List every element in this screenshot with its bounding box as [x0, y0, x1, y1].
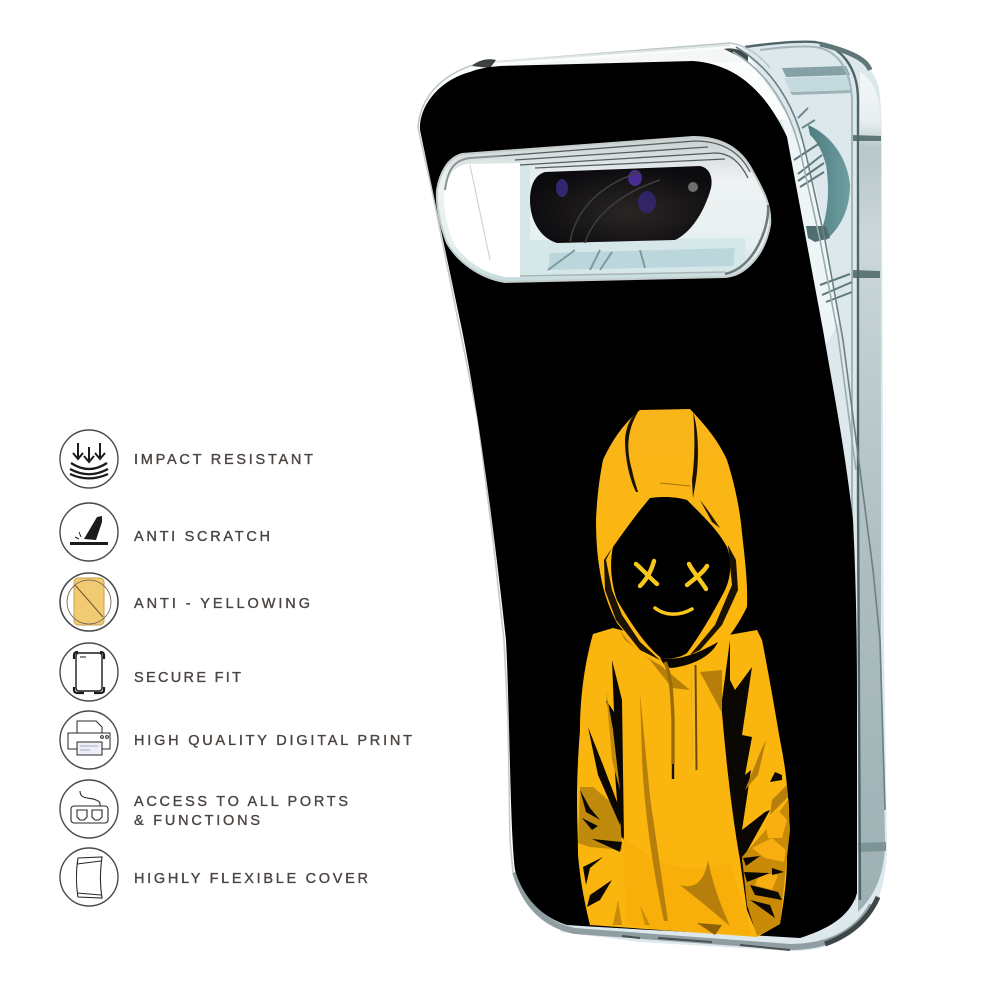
right arm black wedges: [722, 640, 770, 934]
face shadow: [611, 497, 730, 658]
feature: high quality digital print: [60, 711, 412, 769]
black printed case back: [420, 61, 857, 938]
hood inner shadow streaks: [604, 545, 738, 660]
feature list: [60, 430, 412, 906]
label: ANTI SCRATCH: [134, 529, 270, 545]
hood collar amber shadows: [617, 625, 722, 713]
icon: ports: [60, 780, 118, 838]
case bottom band: [515, 872, 872, 947]
label: HIGHLY FLEXIBLE COVER: [134, 871, 368, 887]
label: HIGH QUALITY DIGITAL PRINT: [134, 733, 412, 749]
neck shadow: [660, 642, 718, 668]
feature: highly flexible cover: [60, 848, 368, 906]
icon: bent cover: [60, 848, 118, 906]
icon: impact arrows: [60, 430, 118, 488]
icon: printer: [60, 711, 118, 769]
left arm amber shadow: [578, 690, 622, 850]
body swoosh shadow: [680, 860, 730, 926]
clear case diagonal curved edge: [736, 47, 885, 810]
feature: secure fit: [60, 643, 241, 701]
phone frame rail lines: [745, 42, 860, 900]
back phone body seen through clear case: [560, 42, 887, 951]
icon: blade on surface: [60, 503, 118, 561]
feature: anti scratch: [60, 503, 270, 561]
label: ANTI - YELLOWING: [134, 596, 310, 612]
teal camera ring: [808, 125, 850, 240]
clear case outer edge: [418, 43, 885, 950]
X eye right: [687, 564, 707, 589]
white reflection panels left of rail: [772, 90, 840, 345]
label: ACCESS TO ALL PORTS: [134, 794, 348, 810]
phone case product photo: [418, 42, 887, 951]
body fold stripe: [640, 693, 668, 921]
camera cutout: clear lens bump: [437, 137, 770, 282]
camera lens window: [530, 166, 712, 243]
feature: access to all ports and functions: [60, 780, 348, 838]
right arm amber folds: [742, 800, 790, 936]
left arm streaks: [580, 727, 622, 907]
feature: anti yellowing: [60, 573, 310, 631]
hoodie body: [577, 628, 789, 937]
smile: [655, 608, 692, 614]
hood: [596, 409, 747, 660]
X eye left: [636, 561, 657, 586]
interior bars: [782, 66, 850, 77]
side strip of phone frame: [858, 72, 885, 912]
left arm black wedge: [606, 660, 624, 840]
drawstring left: [665, 662, 673, 764]
label: SECURE FIT: [134, 670, 241, 686]
drawstring right: [694, 665, 695, 770]
label: IMPACT RESISTANT: [134, 452, 313, 468]
icon: yellow case with slash: [60, 573, 118, 631]
body lower shading: [623, 837, 752, 935]
hood fold lines: [625, 412, 720, 528]
icon: phone with bumper corners: [60, 643, 118, 701]
hoodie character artwork: [577, 409, 790, 937]
feature: impact resistant: [60, 430, 313, 488]
label second line: & FUNCTIONS: [134, 813, 260, 829]
